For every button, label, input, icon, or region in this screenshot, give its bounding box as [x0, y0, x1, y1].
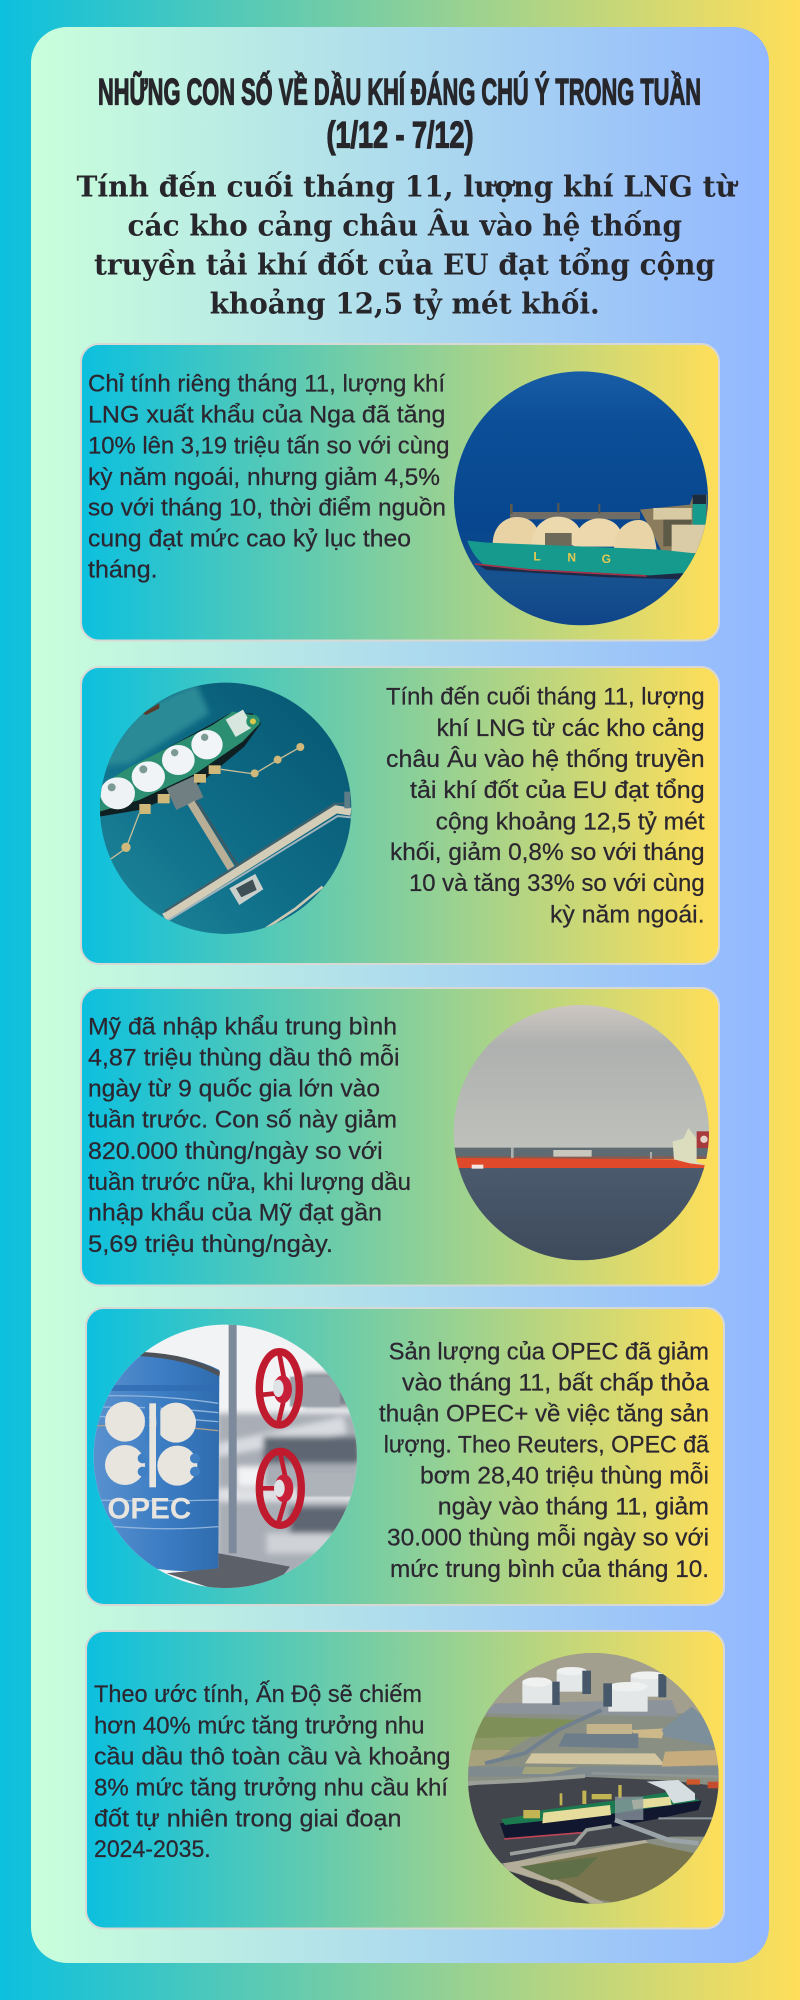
text: card 3: ngày từ 9 quốc gia lớn vào	[88, 1076, 380, 1103]
text: card 4: mức trung bình của tháng 10.	[390, 1556, 709, 1583]
barrel	[90, 1353, 219, 1571]
OPEC logo	[105, 1402, 197, 1487]
text: card 4: lượng. Theo Reuters, OPEC đã	[384, 1432, 710, 1459]
text: card 2: cộng khoảng 12,5 tỷ mét	[436, 808, 705, 835]
text: card 4: bơm 28,40 triệu thùng mỗi	[420, 1462, 709, 1490]
text: card 5: Theo ước tính, Ấn Độ sẽ chiếm	[94, 1680, 422, 1708]
image: LNG terminal with docked tanker	[465, 1650, 723, 1908]
valves	[290, 1377, 353, 1497]
hull	[467, 541, 707, 578]
text: card 2: châu Âu vào hệ thống truyền	[386, 746, 705, 773]
title	[98, 70, 701, 156]
text: card 4: vào tháng 11, bất chấp thỏa	[402, 1370, 710, 1397]
text: card 5: đốt tự nhiên trong giai đoạn	[94, 1805, 402, 1832]
image: LNG tanker at sea: G	[602, 552, 611, 566]
text: card 5: 8% mức tăng trưởng nhu cầu khí	[94, 1774, 448, 1802]
image: LNG tanker at sea: L	[533, 549, 541, 563]
subtitle: các kho cảng châu Âu vào hệ thống	[128, 208, 682, 242]
text: card 1: kỳ năm ngoái, nhưng giảm 4,5%	[88, 464, 440, 491]
panel: card 1 Russian LNG exports	[81, 344, 719, 640]
title: (1/12 - 7/12)	[326, 114, 474, 156]
text: card 3: Mỹ đã nhập khẩu trung bình	[88, 1013, 397, 1040]
spherical tanks	[100, 777, 135, 809]
text: card 1: so với tháng 10, thời điểm nguồn	[88, 495, 446, 522]
text: card 1: LNG xuất khẩu của Nga đã tăng	[88, 402, 445, 428]
subtitle	[76, 170, 739, 320]
text: card 4: thuận OPEC+ về việc tăng sản	[379, 1400, 709, 1427]
subtitle: truyền tải khí đốt của EU đạt tổng cộng	[94, 246, 715, 282]
text: card 4: ngày vào tháng 11, giảm	[438, 1493, 709, 1520]
text: card 4: 30.000 thùng mỗi ngày so với	[387, 1524, 709, 1552]
text: card 1: cung đạt mức cao kỷ lục theo	[88, 526, 411, 553]
text: card 2	[386, 684, 705, 928]
panel: card 3 US crude imports	[81, 988, 719, 1286]
panel: card 5 India demand	[86, 1631, 724, 1928]
blurred pipes	[217, 1373, 360, 1590]
image: red oil tanker on horizon	[450, 1002, 712, 1264]
jetty	[615, 1820, 698, 1843]
panel: card 2 EU LNG send-out	[81, 667, 719, 964]
image: OPEC barrel and red valves	[90, 1320, 360, 1590]
image: LNG tanker at sea: N	[567, 551, 576, 565]
text: card 5: 2024-2035.	[94, 1836, 211, 1863]
panel: card 4 OPEC output	[86, 1308, 724, 1605]
text: card 5: hơn 40% mức tăng trưởng nhu	[94, 1712, 424, 1740]
text: card 1	[88, 370, 450, 583]
text: card 5	[94, 1680, 450, 1863]
ship superstructure	[640, 495, 707, 555]
image: LNG tanker at sea	[450, 368, 712, 630]
text: card 2: Tính đến cuối tháng 11, lượng	[386, 684, 705, 711]
text: card 2: khối, giảm 0,8% so với tháng	[390, 839, 705, 866]
text: card 2: tải khí đốt của EU đạt tổng	[410, 777, 705, 804]
text: card 1: 10% lên 3,19 triệu tấn so với cùng	[88, 433, 450, 460]
text: card 4: Sản lượng của OPEC đã giảm	[389, 1338, 709, 1365]
tanks	[493, 517, 541, 545]
text: card 2: khí LNG từ các kho cảng	[437, 715, 705, 742]
text: card 3: nhập khẩu của Mỹ đạt gần	[88, 1200, 382, 1227]
terminal land	[488, 1653, 700, 1714]
text: card 1: Chỉ tính riêng tháng 11, lượng khí	[88, 370, 445, 397]
text: card 3: tuần trước. Con số này giảm	[88, 1107, 397, 1134]
text: card 3: 4,87 triệu thùng dầu thô mỗi	[88, 1044, 400, 1071]
image: OPEC barrel and red valves: OPEC	[107, 1493, 191, 1526]
text: card 3: tuần trước nữa, khi lượng dầu	[88, 1169, 411, 1196]
water	[465, 1777, 723, 1863]
text: card 3	[88, 1013, 411, 1258]
text: card 2: kỳ năm ngoái.	[550, 901, 705, 928]
text: card 5: cầu dầu thô toàn cầu và khoảng	[94, 1743, 450, 1770]
tanker	[500, 1801, 702, 1838]
tanks	[522, 1672, 664, 1712]
text: card 4	[379, 1338, 710, 1583]
foreground marsh	[512, 1843, 695, 1903]
text: card 1: tháng.	[88, 556, 158, 583]
text: card 2: 10 và tăng 33% so với cùng	[409, 870, 705, 897]
text: card 3: 5,69 triệu thùng/ngày.	[88, 1231, 333, 1258]
subtitle: Tính đến cuối tháng 11, lượng khí LNG từ	[76, 170, 739, 204]
jetty	[166, 776, 203, 810]
image: LNG tanker at jetty, aerial	[96, 680, 356, 940]
text: card 3: 820.000 thùng/ngày so với	[88, 1138, 383, 1165]
subtitle: khoảng 12,5 tỷ mét khối.	[210, 286, 600, 320]
